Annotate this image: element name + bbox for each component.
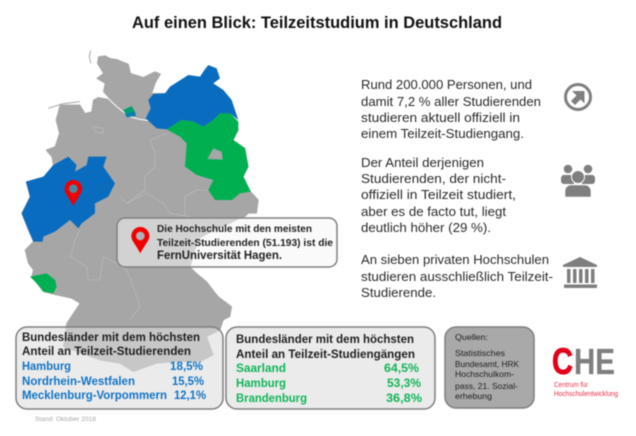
map of Germany	[22, 51, 258, 372]
panel: Quellen	[445, 327, 534, 408]
map: state borders	[70, 127, 210, 320]
text block: 200.000 Personen: damit 7,2 % aller Studierenden	[361, 95, 541, 109]
panel heading: Anteil an Teilzeit-Studiengängen	[236, 347, 415, 361]
ranking list: blue: Nordrhein-Westfalen	[22, 374, 135, 388]
map: Hamburg	[123, 106, 136, 117]
sources text	[455, 332, 519, 401]
map: northern islands	[48, 51, 91, 108]
text block: 200.000 Personen: studieren aktuell offiziell in	[361, 111, 520, 125]
ranking list: blue: Mecklenburg-Vorpommern	[22, 388, 167, 402]
callout text: FernUniversität Hagen.	[157, 250, 282, 262]
logo: CHE: Hochschulentwicklung	[554, 389, 618, 398]
text block: Anteil de facto: deutlich höher (29 %).	[361, 221, 491, 235]
sources text: pass, 21. Sozial-	[455, 381, 518, 391]
callout text: Die Hochschule mit den meisten	[157, 224, 312, 235]
sources text: Hochschulkom-	[455, 369, 514, 379]
ranking list: green: 64,5%	[384, 361, 419, 375]
icon: red location pin	[131, 227, 149, 253]
logo: CHE	[552, 341, 618, 398]
text block: 200.000 Personen: Rund 200.000 Personen, und	[361, 78, 532, 92]
ranking list: blue: 18,5%	[170, 359, 203, 373]
ranking list: green: Brandenburg	[236, 391, 307, 405]
sources text: Statistisches	[455, 348, 505, 358]
panel heading: Bundesländer mit dem höchsten	[22, 330, 200, 344]
text block: 200.000 Personen: einem Teilzeit-Studiengang.	[361, 127, 524, 141]
text block: private Hochschulen: Studierende.	[361, 286, 436, 300]
map: Brandenburg	[167, 113, 251, 200]
text block: private Hochschulen: studieren ausschließlich Teilzeit-	[361, 270, 553, 284]
panel: Anteil an Teilzeit-Studiengängen	[226, 327, 435, 409]
map: Saarland	[30, 273, 57, 293]
ranking list: blue	[22, 359, 206, 402]
footnote: date: Stand: Oktober 2018	[35, 416, 96, 423]
ranking list: green: 36,8%	[386, 391, 422, 405]
title: Auf einen Blick: Teilzeitstudium in Deutschland	[132, 13, 502, 32]
map: Elbe river gap	[107, 98, 148, 121]
callout text: Teilzeit-Studierenden (51.193) ist die	[157, 238, 333, 249]
text block: private Hochschulen	[361, 253, 553, 300]
panel: Anteil an Teilzeit-Studierenden	[16, 327, 223, 409]
sources text: Bundesamt, HRK	[455, 359, 519, 369]
panel heading: Bundesländer mit dem höchsten	[236, 332, 414, 346]
panel heading: Anteil an Teilzeit-Studierenden	[22, 344, 191, 358]
map: base country shape	[22, 56, 258, 372]
text block: Anteil de facto: offiziell in Teilzeit studiert,	[361, 188, 516, 202]
map: Nordrhein-Westfalen	[22, 157, 115, 242]
icon: red location pin on Hagen	[65, 180, 82, 206]
icon: university building	[563, 257, 597, 288]
text block: private Hochschulen: An sieben privaten Hochschulen	[361, 253, 549, 267]
text block: Anteil de facto: Der Anteil derjenigen	[361, 156, 484, 170]
text block: 200.000 Personen	[361, 78, 541, 141]
text block: Anteil de facto: Studierenden, der nicht-	[361, 172, 506, 186]
icon: group of people	[561, 165, 595, 197]
panel heading	[22, 330, 200, 358]
ranking list: green: Saarland	[236, 361, 286, 375]
logo: CHE: C	[552, 341, 573, 382]
ranking list: blue: 15,5%	[172, 374, 204, 388]
ranking list: blue: Hamburg	[22, 359, 71, 373]
ranking list: blue: 12,1%	[174, 388, 206, 402]
callout: FernUniversität Hagen	[117, 218, 337, 267]
logo: CHE: HE	[574, 341, 615, 382]
ranking list: green: Hamburg	[236, 376, 286, 390]
text block: Anteil de facto: aber es de facto tut, liegt	[361, 205, 507, 219]
logo: CHE: Centrum für	[554, 380, 588, 389]
text block: Anteil de facto	[361, 156, 516, 235]
ranking list: green: 53,3%	[387, 376, 421, 390]
callout text	[157, 224, 333, 262]
sources text: Quellen:	[455, 332, 488, 342]
icon: arrow in circle	[566, 84, 590, 110]
map: Mecklenburg-Vorpommern	[146, 65, 238, 129]
ranking list: green	[236, 361, 422, 405]
sources text: erhebung	[455, 391, 492, 401]
panel heading	[236, 332, 415, 361]
